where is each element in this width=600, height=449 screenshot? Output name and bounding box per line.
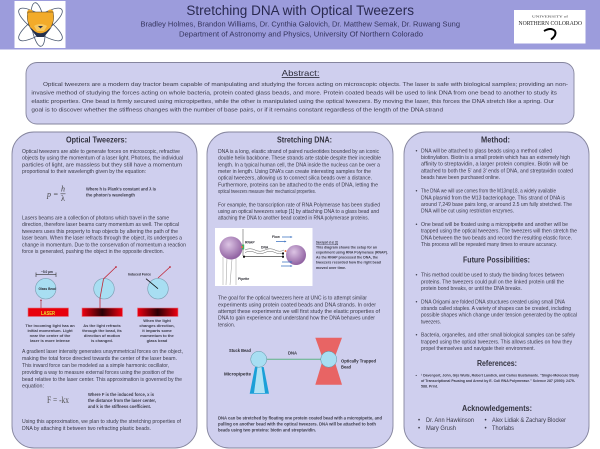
note: planck constant: the photon's wavelength [86,193,136,198]
list: acknowledgements: Alex Lidiak & Zachary Blocker [492,418,566,424]
list: future bullets: This method could be used to study the binding forces between [421,273,564,279]
caption: davenport: Davenport et al. [1] [316,240,338,244]
text: goal at unc: tension. [218,322,235,328]
abstract text: elastic properties. One bead is firmly secured using micropipettes, while the other is manipulated using the optical tweezers. By moving the laser, this forces the DNA stretch like a spring. Our [31,99,554,105]
text: rna polymerase: For example, the transcription rate of RNA Polymerase has been studied [218,202,380,208]
list: method bullets: One bead will be fixated using a micropipette and another will be [421,222,568,228]
abstract text [31,82,568,114]
heading: references: References: [477,359,517,368]
panel: stretching dna [207,132,393,448]
panel: optical tweezers [12,132,197,448]
text: gradient force: providing a way to measure external forces using the position of the [22,370,174,376]
text: laser momentum: direction, therefore laser beams carry momentum as well. The optical [22,222,179,228]
caption: refraction: is changed. [91,338,113,343]
abstract text: Optical tweezers are a modern day tractor beam capable of manipulating and studying the forces acting on microscopic objects. The laser is safe with biological samples; providing an non- [43,82,568,88]
text: approximation: Using this approximation, we plan to study the stretching properties of [22,419,181,425]
caption: change of direction: changes direction, [139,323,175,328]
text: dna description: optical tweezers measure their mechanical properties. [218,189,316,195]
caption: change of direction: glass bead [147,338,168,343]
caption: incoming light: initial momentum. Light [27,328,73,333]
abstract text: goal is to discover whether the stiffness changes with the number of base pairs, or if it remains constant regardless of the length of the DNA strand [31,108,443,114]
list: acknowledgements [418,418,566,432]
text: goal at unc: The goal for the optical tweezers here at UNC is to attempt similar [218,296,367,302]
note: hooke's law [88,392,156,409]
caption: stretching setup: DNA can be stretched by floating one protein coated bead with a micropipette, and [218,416,383,420]
list: acknowledgements: Mary Grush [426,426,456,432]
caption: stretching setup: beads using two proteins: biotin and streptavidin. [218,428,316,433]
list: method bullets: • [416,148,418,154]
text: laser momentum [22,216,186,255]
title: Stretching DNA with Optical Tweezers [186,3,414,18]
diagram: laser refraction [28,266,178,317]
list: method bullets: attached to both the 5' and 3' ends of DNA, and streptavidin coated [421,168,573,174]
caption: incoming light: near the center of the [30,333,71,338]
logo: bear and atom [14,1,66,48]
text: goal at unc [218,296,380,328]
caption: refraction: As the light refracts [83,323,122,328]
caption: incoming light: laser is more intense [30,338,71,343]
equation: momentum: h [61,184,65,194]
caption: davenport: moved over time. [316,265,346,270]
diagram: dna between beads: Bead [341,364,351,370]
list: acknowledgements: • [484,426,487,432]
heading: method: Method: [481,136,510,144]
heading: optical tweezers: Optical Tweezers: [66,136,127,144]
list: references: 588. Print. [421,383,438,388]
diagram: laser refraction: Glass Bead [38,287,56,291]
text: dna description: optical tweezers, allowing us to connect silica beads over a distance. [218,176,372,182]
text: gradient force: bead relative to the laser center. This approximation is governed by the [22,377,182,383]
caption: stretching setup: pulling on another bead with the optical tweezers. DNA will be attached to both [218,422,377,427]
list: future bullets: possible shapes which change under tension generated by the optical [421,313,577,319]
list: acknowledgements: • [418,418,420,424]
list: acknowledgements: Thorlabs [492,426,514,432]
text: goal at unc: DNA to gain experience and understand how the DNA behaves under [218,316,375,322]
heading: stretching dna: Stretching DNA: [277,136,332,144]
list: future bullets: • [416,273,418,279]
diagram: laser refraction: Induced Force [128,273,151,277]
list: method bullets: • [416,222,418,228]
text: gradient force: making the total force directed towards the center of the laser beam. [22,356,177,362]
list: references: • [416,373,418,378]
list: future bullets [416,273,577,352]
equation: momentum [46,184,66,203]
list: future bullets: tweezers. [421,319,441,325]
list: method bullets: This process will be repeated many times to ensure accuracy. [421,242,557,248]
list: method bullets: beads have been purchased online. [421,175,500,181]
panel: method [404,132,589,448]
abstract text: invasive method of studying the forces acting on whole bacteria, protein coated glass beads, and more. Protein coated beads will be used to link DNA from one bead to another to study its [31,90,557,96]
list: references [416,373,580,388]
note: planck constant [86,186,157,198]
diagram: laser refraction: LASER [41,311,55,317]
caption: refraction: through the bead, its [82,328,123,333]
equation: momentum: λ [61,194,65,203]
list: method bullets: DNA plasmid from the M13 bacteriophage. This strand of DNA is [421,195,565,201]
text: optical tweezers intro: particles of light, are massless but they still have a momentum [22,162,182,168]
list: method bullets: DNA will be cut using restriction enzymes. [421,209,514,215]
diagram: dna between beads: Optically Trapped [341,358,376,364]
diagram: rnap experiment: Flow [272,235,280,239]
list: method bullets: trapped using the optical tweezers. The tweezers will then stretch the [421,229,577,235]
diagram: rnap experiment [215,228,312,286]
list: method bullets: DNA will be attached to glass beads using a method called [421,148,552,154]
text: laser momentum: force is generated, pushing the object in the opposite direction. [22,249,164,255]
list: acknowledgements: Dr. Ann Hawkinson [426,418,474,424]
text: optical tweezers intro [22,149,183,175]
list: method bullets: • [416,189,418,195]
text: optical tweezers intro: proportional to their wavelength given by the equation: [22,169,146,175]
logo: University of Northern Colorado: UNIVERSITY of [532,14,569,18]
equation: momentum: p = [46,190,58,199]
list: method bullets: DNA between the two beads and record the resulting elastic force. [421,235,572,241]
diagram: dna between beads [224,338,376,394]
text: gradient force [22,349,183,390]
list: future bullets: propel themselves and navigate their environment. [421,346,535,352]
list: method bullets: around 7,249 base pairs long, or around 2.5 um fully stretched. The [421,202,572,208]
text: rna polymerase: using an optical tweezers setup [1] by attaching DNA to a glass bead and [218,209,379,215]
diagram: rnap experiment: DNA [261,246,269,250]
caption: davenport: tweezers recorded how the right bead [316,260,382,264]
text: dna description: meter in length. Using DNA's can create interesting samples for the [218,169,371,175]
caption: davenport: experiment using RNA Polymerase (RNAP). [316,250,388,254]
department: Department of Astronomy and Physics, University Of Northern Colorado [179,32,423,38]
list: acknowledgements: • [418,426,420,432]
text: laser momentum: Lasers beams are a collection of photons which travel in the same [22,216,169,222]
diagram: dna between beads: DNA [288,350,297,356]
diagram: rnap experiment: RNAP [245,240,255,244]
caption: davenport [316,240,388,270]
list: future bullets: • [416,299,418,305]
caption: change of direction: momentum to the [140,333,175,338]
authors: Bradley Holmes, Brandon Williams, Dr. Cynthia Galovich, Dr. Matthew Semak, Dr. Ruwang Sung [140,22,460,28]
text: gradient force: equation: [22,384,44,390]
caption: incoming light [25,323,75,343]
diagram: dna between beads: Stuck Bead [229,348,251,353]
list: future bullets: strands called staples. A variety of shapes can be created, including [421,306,571,312]
text: laser momentum: change in momentum. Due to the conservation of momentum a reaction [22,242,186,248]
text: dna description: double helix backbone. These strands arte stable despite their incredible [218,156,381,162]
equation: hooke's law: F = -kx [47,395,69,405]
note: hooke's law: and k is the stiffness coefficient. [88,404,151,409]
list: future bullets: trapped using the optical tweezers. This allows studies on how they [421,339,572,345]
note: hooke's law: Where F is the induced force, x is [88,392,155,397]
text: gradient force: A gradient laser intensity generates unsymmetrical forces on the object, [22,349,183,355]
caption: change of direction [139,318,175,343]
logo: University of Northern Colorado: NORTHERN COLORADO [518,20,582,27]
caption: refraction: direction of motion [84,333,121,338]
note: planck constant: Where h is Plank's constant and λ is [86,186,157,192]
logo: University of Northern Colorado [514,10,586,44]
list: references: of Transcriptional Pausing and Arrest by E. Coli RNA Polymerase." Science 287 (2000): 2479- [421,378,576,383]
list: references: ¹ Davenport, John, Gijs Wuite, Robert Landick, and Carlos Bustamante. "Single-Molecule Study [421,373,580,378]
caption: change of direction: When the light [143,318,171,323]
text: dna description: Furthermore, proteins can be attached to the ends of DNA, letting the [218,182,378,188]
panel: abstract [26,62,574,124]
text: laser momentum: tweezers uses this property to trap objects by altering the path of the [22,229,178,235]
caption: refraction [82,323,123,343]
header band [0,0,600,50]
text: optical tweezers intro: Optical tweezers are able to generate forces on microscopic, refractive [22,149,180,155]
text: optical tweezers intro: objects by using the momentum of a laser light. Photons, the individual [22,156,183,162]
caption: incoming light: The incoming light has an [25,323,75,328]
list: future bullets: proteins. The tweezers could pull on the linked protein until the [421,279,564,285]
text: laser momentum: laser beam. When the laser refracts through the object, its undergoes a [22,236,183,242]
list: future bullets: DNA Origami are folded DNA structures created using small DNA [421,299,565,305]
text: goal at unc: attempt these experiments we will first study the elastic properties of [218,309,380,315]
heading: acknowledgements: Acknowledgements: [462,404,532,413]
text: gradient force: This inward force can be modeled as a simple harmonic oscillator, [22,363,169,369]
list: future bullets: Bacteria, organelles, and other small biological samples can be safely [421,333,575,339]
list: method bullets: biotinylation. Biotin is a small protein which has an extremely high [421,155,570,161]
caption: davenport: As the RNAP processed the DNA, the [316,254,379,260]
text: dna description: length. In a typical human cell, the DNA inside the nucleus can be over a [218,162,381,168]
note: hooke's law: the distance from the laser center, [88,398,156,403]
list: method bullets: affinity to streptavidin, a larger protein complex. Biotin will be [421,162,568,168]
text: approximation [22,419,181,432]
heading: future possibilities: Future Possibilities: [463,255,530,264]
text: approximation: DNA by attaching it between two refracting plastic beads. [22,426,151,432]
text: dna description: DNA is a long, elastic strand of paired nucleotides bounded by an iconic [218,149,379,155]
list: acknowledgements: • [484,418,487,424]
abstract heading: Abstract: [282,68,320,78]
caption: davenport: This diagram shows the setup for an [316,244,377,250]
list: method bullets: The DNA we will use comes from the M13mp18, a widely available [421,189,556,195]
diagram: laser refraction: ~5.0 µm [41,270,53,274]
list: future bullets: protein bond breaks, or until the DNA breaks. [421,286,522,292]
text: goal at unc: experiments using protein coated beads and DNA strands. In order [218,302,376,308]
diagram: rnap experiment: Pipette [238,277,249,281]
list: method bullets [416,148,577,248]
diagram: dna between beads: Micropipette [224,372,252,377]
text: rna polymerase [218,202,380,222]
caption: change of direction: it imparts some [142,328,173,333]
list: future bullets: • [416,333,418,339]
text: dna description [218,149,381,195]
caption: stretching setup [218,416,383,433]
text: rna polymerase: attaching the DNA to another bead coated in RNA polymerase proteins. [218,216,369,222]
